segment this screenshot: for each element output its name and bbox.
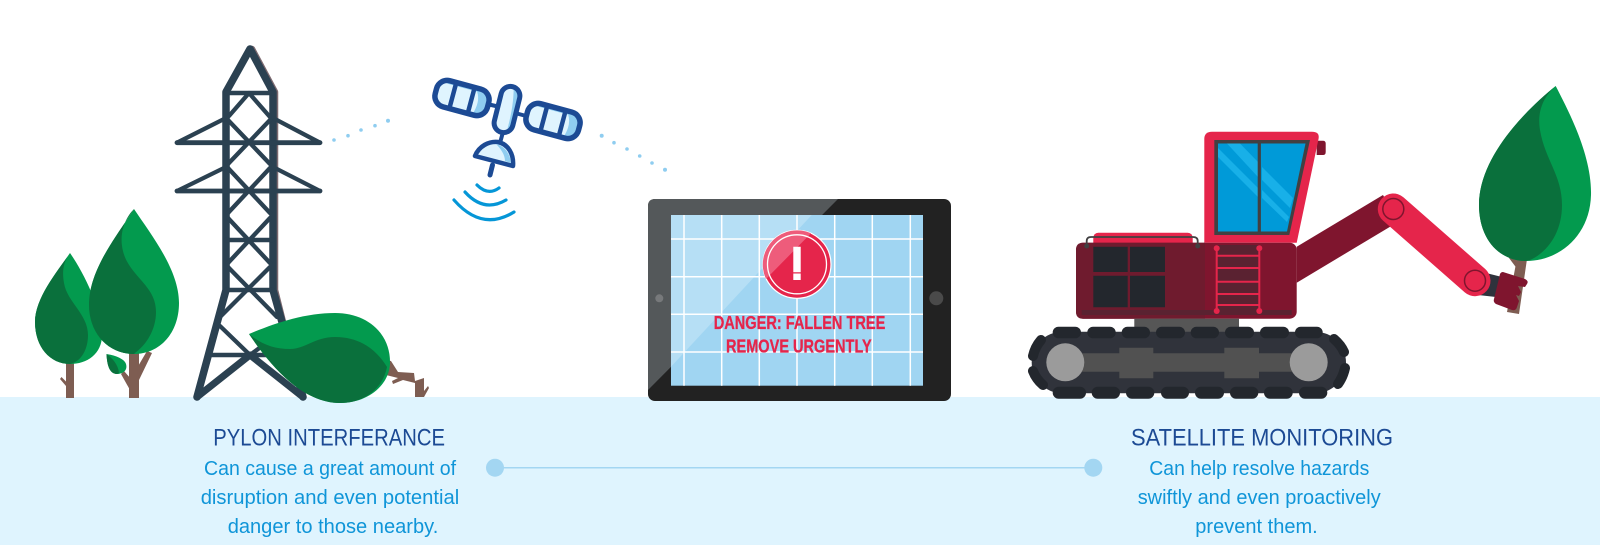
- gripper: [1494, 272, 1528, 310]
- body text: satellite monitoring: swiftly and even proactively: [1138, 486, 1381, 509]
- fallen tree: [249, 313, 429, 403]
- signal waves: [454, 185, 514, 220]
- excavator upper arm: [1383, 198, 1486, 291]
- connector line with end dots: [486, 459, 1102, 477]
- handrail: [1087, 237, 1198, 246]
- small leaf: [106, 354, 126, 374]
- wrist: [1478, 273, 1502, 297]
- body text: satellite monitoring: Can help resolve hazards: [1149, 457, 1369, 480]
- body mount: [1134, 319, 1239, 333]
- body text: satellite monitoring: [1138, 457, 1381, 538]
- dotted link: pylon to satellite: [332, 119, 390, 142]
- text block: satellite monitoring: [1131, 425, 1393, 538]
- left solar panel: [432, 78, 492, 118]
- excavator lower arm: [1297, 195, 1398, 283]
- track wheels: [1046, 343, 1084, 381]
- pylon frame: [177, 49, 320, 397]
- tree: tall left tree with small leaf: [89, 209, 179, 398]
- excavator body: [1076, 237, 1297, 319]
- icon: power pylon: [177, 49, 320, 397]
- satellite dish: [475, 142, 513, 166]
- body text: pylon interference: danger to those nearby.: [228, 515, 438, 538]
- dotted link: satellite to tablet: [600, 134, 667, 172]
- ladder: [1214, 245, 1262, 315]
- excavator: [201, 86, 1591, 538]
- heading: satellite monitoring: SATELLITE MONITORING: [1131, 425, 1393, 452]
- tablet alert text: REMOVE URGENTLY: [726, 336, 872, 356]
- tablet alert text: DANGER: FALLEN TREE: [714, 313, 885, 333]
- satellite body: [492, 84, 522, 135]
- heading: pylon interference: PYLON INTERFERANCE: [213, 425, 445, 452]
- engine vent windows: [1093, 247, 1165, 307]
- engine cover: [1093, 233, 1193, 249]
- body text: satellite monitoring: prevent them.: [1195, 515, 1318, 538]
- held tree: [1479, 86, 1591, 314]
- cabin: [1204, 132, 1326, 243]
- tablet alert text: [714, 313, 885, 356]
- icon: satellite: [432, 78, 583, 220]
- satellite connectors: [487, 104, 530, 143]
- tablet home button: [929, 291, 943, 305]
- caterpillar track: [1032, 327, 1346, 399]
- body text: pylon interference: Can cause a great amount of: [204, 457, 456, 480]
- tree: small left tree: [35, 253, 102, 398]
- ground band: [0, 397, 1600, 545]
- track cleats: [1033, 327, 1345, 399]
- tablet camera: [655, 294, 663, 302]
- right solar panel: [523, 101, 583, 141]
- tablet screen: [671, 215, 923, 386]
- body text: pylon interference: disruption and even potential: [201, 486, 459, 509]
- tablet: [648, 199, 951, 401]
- body text: pylon interference: [201, 457, 459, 538]
- track belt: [1065, 348, 1308, 378]
- text block: pylon interference: [201, 425, 459, 538]
- icon: warning badge: [763, 230, 831, 298]
- pylon shadow edge: [252, 49, 285, 330]
